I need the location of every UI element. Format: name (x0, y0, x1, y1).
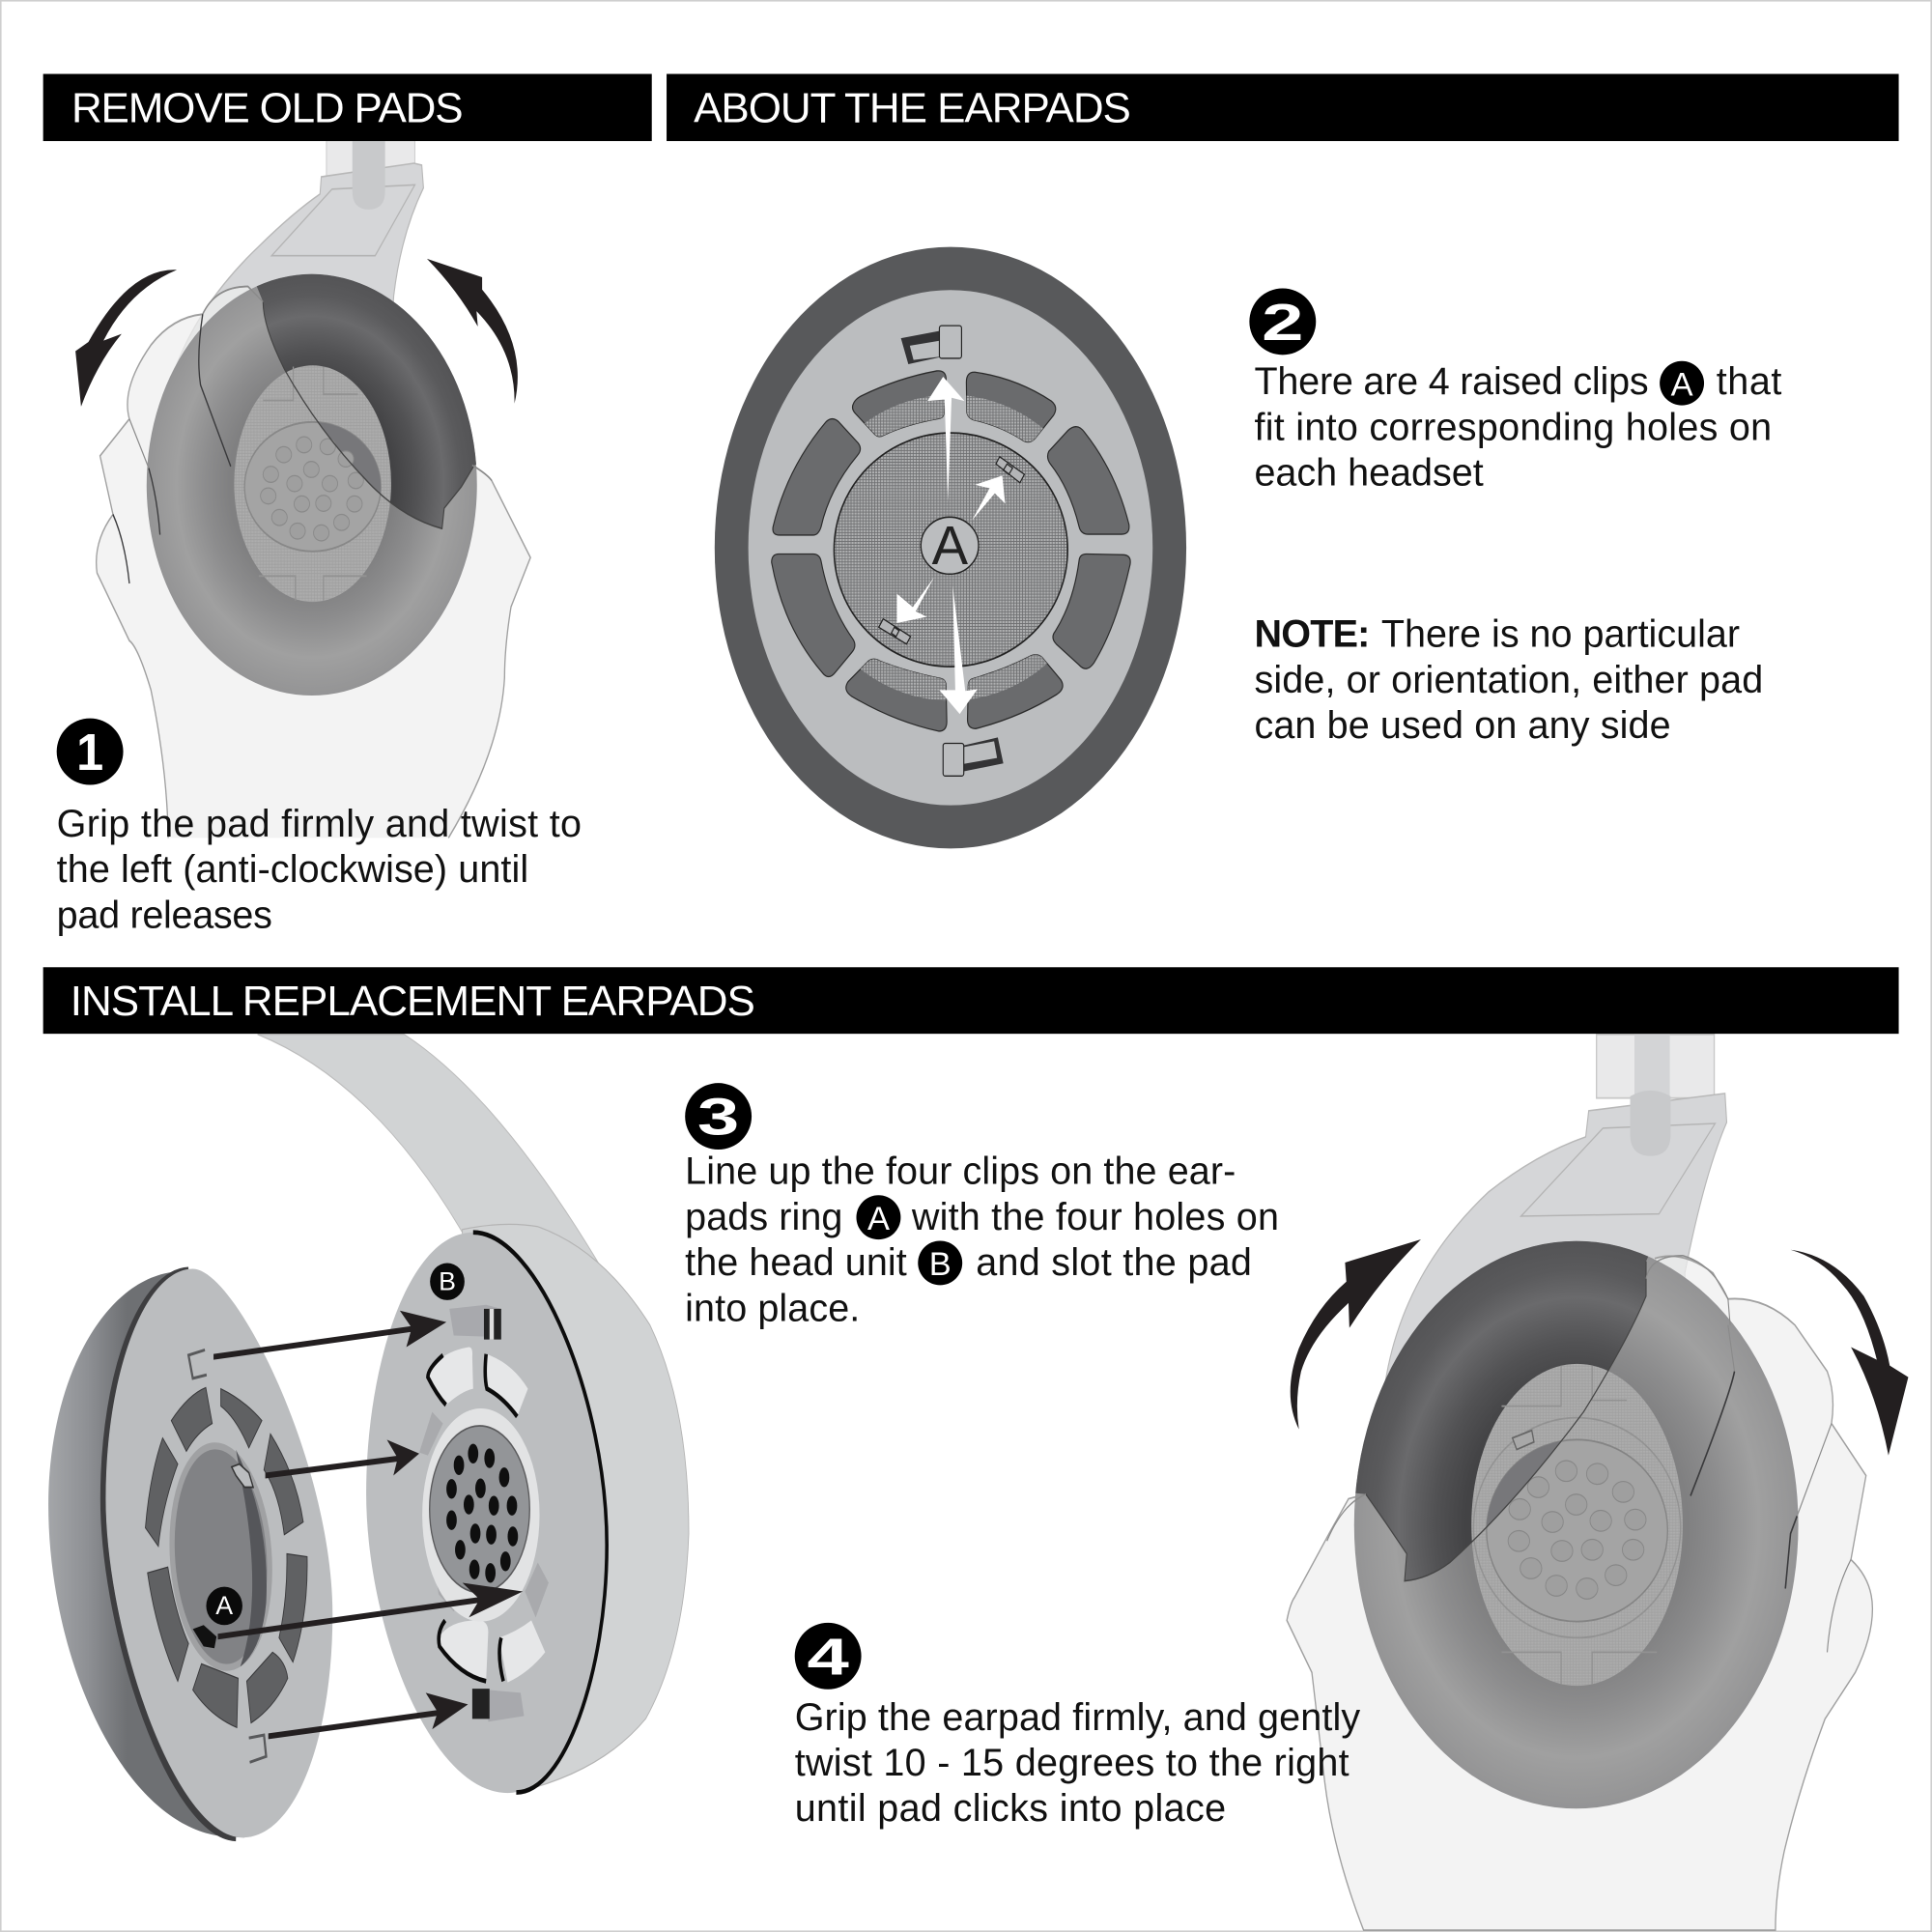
inner face (1471, 1364, 1683, 1686)
illustration: removing old pad (75, 140, 530, 838)
speaker ring (1487, 1439, 1667, 1622)
headband (258, 1035, 611, 1285)
finger creases (113, 314, 231, 583)
label letter A: A (932, 515, 969, 576)
header: remove old pads (43, 74, 652, 141)
illustration: exploded headset and pad (48, 1035, 689, 1837)
step 3 number: 3 (697, 1090, 739, 1147)
step 3 text: and slot the pad (976, 1241, 1252, 1284)
finger outlines (1327, 1256, 1851, 1652)
lighter mesh showing through slots (861, 396, 1047, 701)
step 1 text: pad releases (57, 894, 272, 936)
speaker ring (422, 1408, 540, 1622)
stem pin (353, 140, 385, 210)
header: install replacement earpads: INSTALL REPLACEMENT EARPADS (71, 978, 755, 1025)
badge letter A: A (215, 1591, 233, 1620)
speaker holes (1508, 1461, 1646, 1599)
header: about the earpads: ABOUT THE EARPADS (694, 84, 1131, 131)
ring clip bottom (193, 1625, 216, 1648)
earpad ring dark exposed part (1355, 1240, 1648, 1580)
speaker ring dark part (319, 423, 381, 493)
note text: side, or orientation, either pad (1254, 659, 1763, 701)
step 4 text (795, 1696, 1360, 1830)
step 3 text: with the four holes on (911, 1196, 1279, 1238)
arrow: rotate left (75, 270, 177, 407)
step 4 text: until pad clicks into place (795, 1787, 1226, 1830)
step 3 text: Line up the four clips on the ear- (685, 1151, 1236, 1193)
speaker ring (244, 422, 381, 552)
step 1 number: 1 (76, 724, 103, 781)
faceplate black rim (473, 1233, 607, 1792)
arrow: rotate right (427, 259, 518, 404)
note text (1254, 613, 1763, 747)
step 3 text (685, 1151, 1279, 1329)
note text: NOTE: (1254, 613, 1370, 656)
inner face (234, 365, 391, 602)
stem pin (1631, 1091, 1670, 1156)
headband stem (327, 140, 414, 178)
step 1 text: Grip the pad firmly and twist to (57, 803, 582, 845)
earpad ring dark exposed part (257, 274, 476, 527)
speaker holes (446, 1444, 518, 1582)
inner face struts (1501, 1366, 1657, 1684)
outer speaker ring (1473, 1418, 1681, 1637)
note text: can be used on any side (1254, 704, 1671, 747)
earpad mesh centre (164, 1439, 277, 1674)
speaker grille (430, 1426, 529, 1593)
clip: top (901, 326, 961, 364)
step 2 number: 2 (1262, 295, 1303, 352)
ring clip (1513, 1431, 1534, 1450)
ring clip top (232, 1464, 253, 1488)
step 1 text (57, 803, 582, 936)
earpad slots (146, 1387, 307, 1727)
step 4 text: twist 10 - 15 degrees to the right (795, 1742, 1350, 1784)
speaker ring dark part (1487, 1441, 1560, 1526)
yoke panel outline (271, 185, 414, 256)
step 3 text: into place. (685, 1287, 860, 1329)
label badge A (206, 1587, 242, 1625)
headband stem (1597, 1035, 1715, 1098)
step 3 number (685, 1083, 752, 1150)
step 3 text: A (867, 1201, 890, 1237)
top slot (449, 1305, 501, 1340)
step 2 text: each headset (1254, 452, 1484, 495)
clip: ring top right (996, 457, 1024, 483)
inner plate (749, 290, 1152, 806)
step 2 number (1249, 288, 1316, 355)
opening black edges (428, 1354, 517, 1681)
step 4 number: 4 (807, 1629, 849, 1686)
label circle A (921, 517, 979, 574)
hand right (1287, 1256, 1872, 1930)
yoke (170, 163, 423, 382)
step 1 number (57, 719, 124, 784)
speaker tabs (419, 1412, 549, 1617)
outer pad (715, 247, 1186, 848)
step 1 text: the left (anti-clockwise) until (57, 848, 528, 891)
step 2 text: fit into corresponding holes on (1254, 406, 1772, 448)
label badge B (430, 1264, 465, 1300)
earpad ring light (147, 274, 477, 696)
illustration: installing new pad (1287, 1035, 1908, 1930)
white arrows (896, 377, 1006, 714)
step 3 text: B (929, 1246, 952, 1283)
earpad clips (188, 1350, 267, 1762)
clip: bottom (943, 737, 1004, 776)
yoke (1385, 1094, 1727, 1383)
note text: There is no particular (1381, 613, 1740, 656)
step 4 text: Grip the earpad firmly, and gently (795, 1696, 1360, 1739)
openings (428, 1347, 545, 1683)
step 3 text: the head unit (685, 1241, 907, 1284)
speaker holes (261, 437, 363, 541)
eight slot segments (772, 371, 1130, 731)
step 3 text: pads ring (685, 1196, 842, 1238)
thumb boundary line (1366, 1262, 1646, 1581)
finger creases (1690, 1372, 1797, 1588)
arrow: rotate right (1791, 1250, 1908, 1456)
head unit faceplate (366, 1233, 607, 1793)
illustration: earpad back view (715, 247, 1186, 848)
header: remove old pads: REMOVE OLD PADS (71, 84, 464, 131)
yoke panel outline (1521, 1123, 1715, 1216)
earpad ring light (1354, 1241, 1799, 1808)
clip: ring bottom left (879, 619, 911, 644)
finger outlines (129, 287, 492, 480)
inner face struts (259, 366, 366, 601)
earpad dark seam (103, 1270, 236, 1837)
step 2 text: There are 4 raised clips (1254, 360, 1649, 403)
bottom slot (472, 1689, 524, 1721)
step 2 text: that (1717, 360, 1781, 403)
earpad face (105, 1269, 332, 1837)
arrow: rotate left (1291, 1239, 1421, 1430)
step 2 text (1254, 360, 1781, 495)
arrows to head unit (213, 1311, 523, 1739)
step 4 number (795, 1623, 862, 1690)
stem centre (1634, 1035, 1670, 1098)
hand behind the pad (97, 287, 530, 838)
header: about the earpads (667, 74, 1899, 141)
header: install replacement earpads (43, 967, 1899, 1034)
head unit housing (460, 1224, 689, 1791)
earpad side (48, 1272, 244, 1837)
centre mesh (834, 433, 1067, 667)
thumb boundary line (263, 301, 474, 528)
badge letter B: B (439, 1266, 456, 1295)
earpad mesh shadow (236, 1450, 267, 1666)
step 2 text: A (1671, 366, 1693, 403)
